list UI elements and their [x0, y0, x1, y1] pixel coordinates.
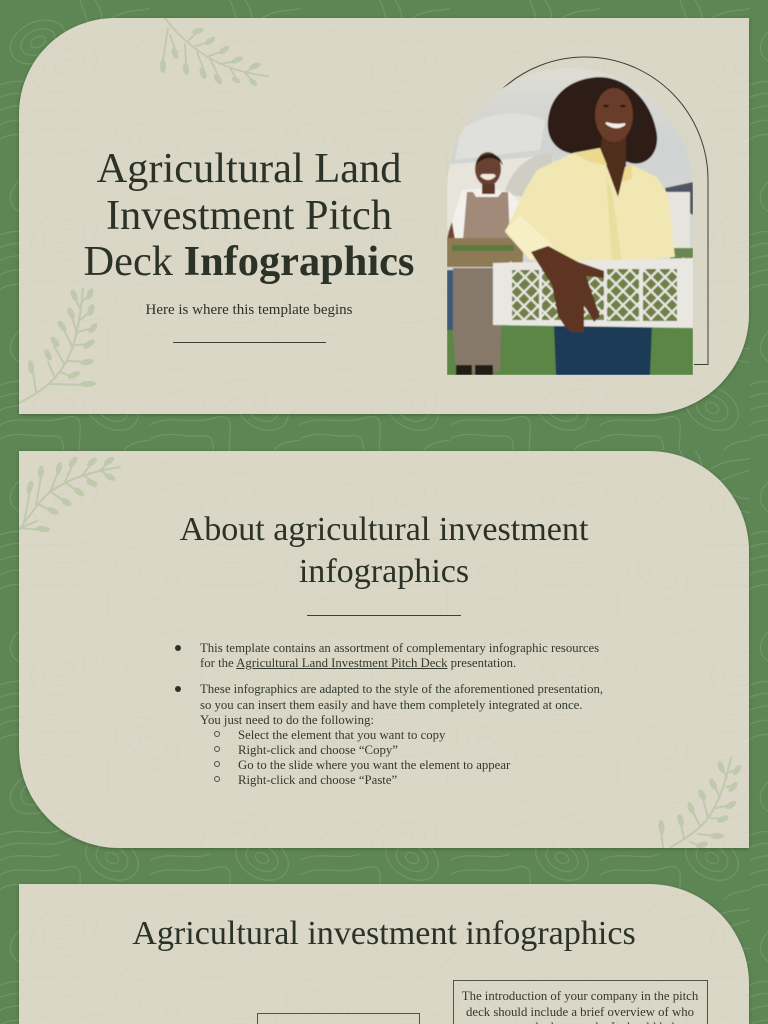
text block: bullet list: for the Agricultural Land Investment Pitch Deck presentation.: [200, 656, 516, 670]
text block: bullet list: Go to the slide where you want the element to appear: [238, 758, 510, 772]
text block: bullet list: Select the element that you want to copy: [238, 728, 445, 742]
icon: bottom-right leaf sprig: [658, 757, 742, 848]
text block: bullet list: You just need to do the following:: [200, 713, 374, 727]
hair: [548, 77, 657, 164]
icon: left leaf sprig: [19, 288, 98, 404]
heading: main title: Investment Pitch: [106, 192, 392, 239]
heading: about title: infographics: [299, 553, 469, 590]
jeans: [554, 326, 652, 375]
image: two farmers carrying crates in an arch frame: [447, 68, 693, 375]
yellow shirt: [505, 148, 675, 262]
text box: company introduction: The introduction of your company in the pitch: [462, 989, 698, 1003]
hand: [531, 246, 604, 332]
heading: infographics title: Agricultural investment infographics: [132, 915, 636, 952]
panel: agricultural investment infographics: [19, 884, 749, 1024]
text block: bullet list: so you can insert them easily and have them completely integrated at once.: [200, 698, 582, 712]
heading: about title: [180, 511, 588, 590]
back farmer: [447, 222, 456, 239]
decorative outline: arch frame: [501, 56, 708, 365]
panel: title slide: [19, 18, 749, 414]
text block: bullet list: [175, 641, 603, 787]
text box: company introduction: [453, 980, 708, 1024]
heading: main title: Agricultural Land: [97, 145, 401, 192]
heading: main title: [84, 145, 414, 285]
text block: bullet list: This template contains an assortment of complementary infographic resources: [200, 641, 599, 655]
text block: bullet list: Right-click and choose “Copy”: [238, 743, 398, 757]
text block: subtitle: Here is where this template begins: [145, 302, 353, 318]
icon: top leaf sprig: [160, 18, 269, 86]
panel: about agricultural investment: [19, 451, 749, 848]
text block: bullet list: These infographics are adapted to the style of the aforementioned presentation,: [200, 682, 603, 696]
greenhouse: [447, 155, 560, 230]
text block: bullet list: Right-click and choose “Paste”: [238, 773, 397, 787]
text box: company introduction: deck should include a brief overview of who: [466, 1004, 694, 1018]
heading: main title: Deck Infographics: [84, 238, 414, 285]
grass: [447, 325, 693, 375]
heading: about title: About agricultural investment: [180, 511, 588, 548]
crate: [493, 258, 693, 328]
face and neck: [600, 135, 626, 197]
text box: lower box: [257, 1013, 420, 1024]
icon: top-left leaf sprig: [19, 456, 121, 532]
